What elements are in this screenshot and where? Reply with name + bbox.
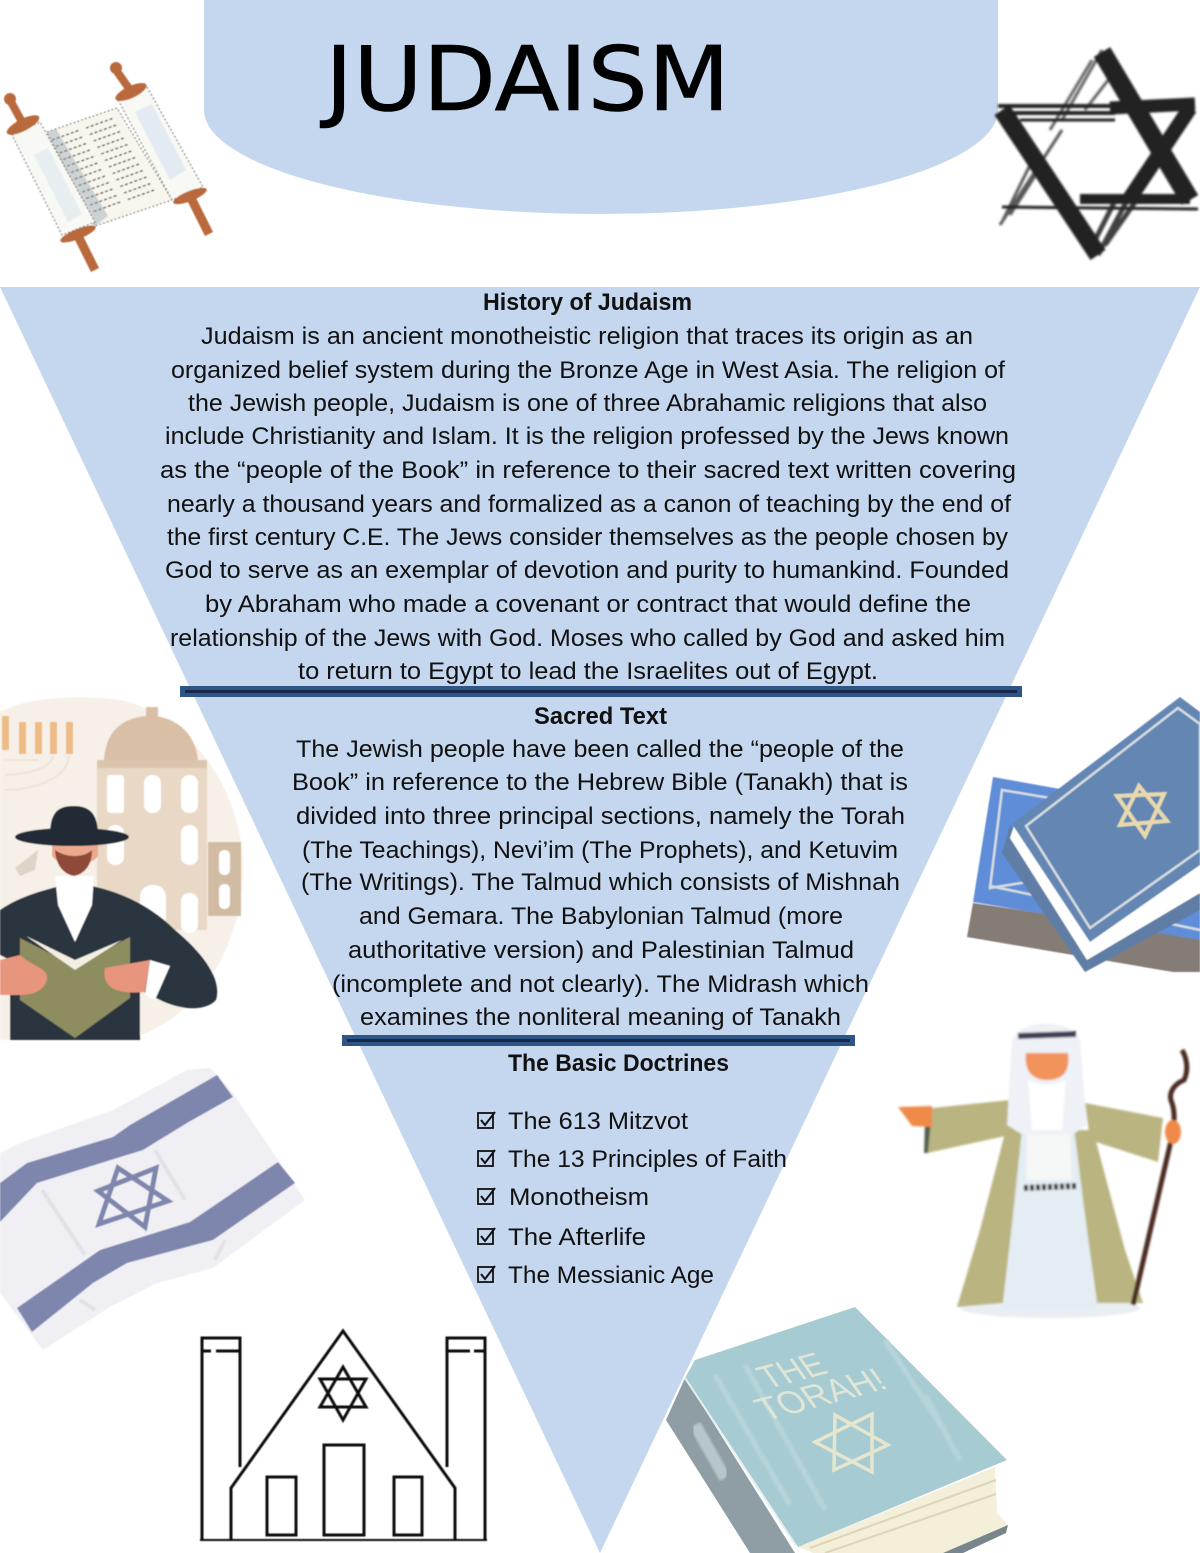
illustration: Moses with staff	[898, 1024, 1187, 1318]
illustration: The Torah book	[666, 1307, 1008, 1553]
illustration: blue books with star	[967, 697, 1200, 972]
heading: Sacred Text: Sacred Text	[534, 703, 667, 730]
history body text: the first century C.E. The Jews consider themselves as the people chosen by	[167, 524, 1008, 551]
heading: The Basic Doctrines: The Basic Doctrines	[508, 1050, 729, 1077]
book title text: THE	[750, 1346, 835, 1396]
history body text: include Christianity and Islam. It is the religion professed by the Jews known	[165, 423, 1009, 450]
history body text: as the “people of the Book” in reference to their sacred text written covering	[160, 457, 1016, 484]
panel: Sacred Text	[292, 703, 908, 1031]
history body text: nearly a thousand years and formalized as a canon of teaching by the end of	[167, 491, 1011, 518]
item: Monotheism: Monotheism	[509, 1184, 649, 1211]
icon: Torah scroll	[4, 62, 209, 270]
icon: brush-stroke Star of David	[998, 50, 1198, 255]
history body text: by Abraham who made a covenant or contract that would define the	[205, 591, 971, 618]
sacred text body: divided into three principal sections, namely the Torah	[296, 803, 905, 830]
sacred text body: Book” in reference to the Hebrew Bible (Tanakh) that is	[292, 769, 908, 796]
sacred text body: examines the nonliteral meaning of Tanakh	[360, 1004, 841, 1031]
icon: synagogue outline	[200, 1331, 487, 1540]
history body text: organized belief system during the Bronze Age in West Asia. The religion of	[171, 357, 1005, 384]
title: JUDAISM	[320, 27, 730, 131]
heading: History of Judaism: History of Judaism	[483, 289, 692, 316]
history body text: to return to Egypt to lead the Israelites out of Egypt.	[298, 658, 878, 685]
illustration: flag of Israel	[0, 1068, 305, 1350]
item: The Afterlife: The Afterlife	[508, 1224, 646, 1251]
star on book cover	[815, 1414, 888, 1472]
item: The 13 Principles of Faith: The 13 Principles of Faith	[508, 1146, 787, 1173]
header banner	[204, 0, 998, 214]
sacred text body: (The Writings). The Talmud which consists of Mishnah	[301, 869, 900, 896]
panel: History of Judaism	[160, 289, 1016, 685]
history body text: the Jewish people, Judaism is one of three Abrahamic religions that also	[188, 390, 987, 417]
sacred text body: The Jewish people have been called the “people of the	[296, 736, 904, 763]
illustration: rabbi reading in front of synagogue	[0, 697, 243, 1040]
history body text: God to serve as an exemplar of devotion and purity to humankind. Founded	[165, 557, 1009, 584]
sacred text body: and Gemara. The Babylonian Talmud (more	[359, 903, 843, 930]
book title text: TORAH!	[748, 1362, 894, 1428]
sacred text body	[292, 736, 908, 1031]
sacred text body: authoritative version) and Palestinian Talmud	[348, 937, 854, 964]
divider bar: sacred text / doctrines	[342, 1035, 855, 1046]
item: The 613 Mitzvot: The 613 Mitzvot	[508, 1108, 688, 1135]
checklist of doctrines	[478, 1108, 787, 1289]
divider bar: history / sacred text	[180, 686, 1022, 697]
sacred text body: (incomplete and not clearly). The Midrash which	[332, 971, 869, 998]
panel: The Basic Doctrines	[478, 1050, 787, 1289]
item: The Messianic Age: The Messianic Age	[508, 1262, 714, 1289]
sacred text body: (The Teachings), Nevi’im (The Prophets), and Ketuvim	[302, 837, 898, 864]
history body text	[160, 323, 1016, 685]
history body text: relationship of the Jews with God. Moses who called by God and asked him	[170, 625, 1005, 652]
history body text: Judaism is an ancient monotheistic religion that traces its origin as an	[201, 323, 973, 350]
